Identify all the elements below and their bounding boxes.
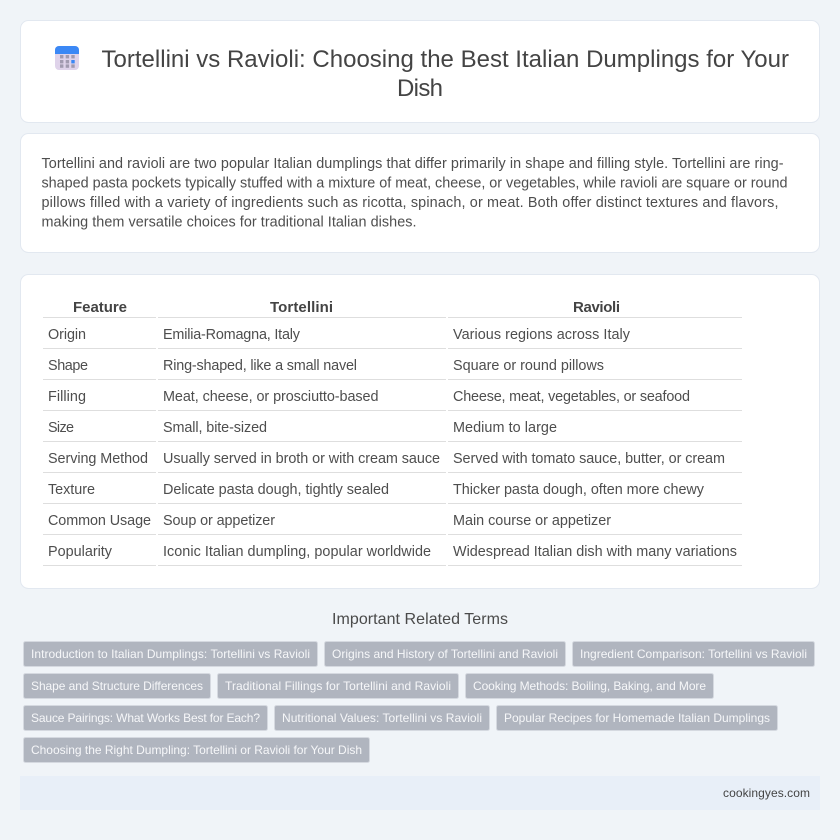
table row: popularity	[48, 544, 737, 560]
table row: filling	[48, 389, 690, 405]
tag: Popular Recipes for Homemade Italian Dumplings	[504, 711, 770, 725]
table row: filling: Cheese, meat, vegetables, or seafood	[453, 389, 690, 405]
tag	[24, 674, 210, 698]
table row: size: Size	[48, 420, 74, 436]
title: Dish	[397, 75, 443, 102]
table row: serving method: Served with tomato sauce, butter, or cream	[453, 451, 725, 467]
table row: serving method: Serving Method	[48, 451, 148, 467]
panel: introduction	[20, 134, 820, 252]
title	[102, 46, 789, 102]
table row: texture: Delicate pasta dough, tightly sealed	[163, 482, 389, 498]
table header: Feature	[73, 299, 127, 316]
table row: common usage: Soup or appetizer	[163, 513, 275, 529]
tag	[218, 674, 458, 698]
table row: popularity: Iconic Italian dumpling, popular worldwide	[163, 544, 431, 560]
table row: origin	[48, 327, 631, 343]
tag: Shape and Structure Differences	[31, 679, 203, 693]
table header: Tortellini	[270, 299, 333, 316]
table row: serving method: Usually served in broth or with cream sauce	[163, 451, 440, 467]
tag: Nutritional Values: Tortellini vs Ravioli	[282, 711, 482, 725]
tag: Cooking Methods: Boiling, Baking, and More	[473, 679, 706, 693]
table row lines	[43, 317, 742, 566]
tag	[274, 706, 490, 730]
tag: Choosing the Right Dumpling: Tortellini or Ravioli for Your Dish	[31, 743, 362, 757]
table row: shape: Square or round pillows	[453, 358, 604, 374]
tag	[466, 674, 714, 698]
table row: common usage: Main course or appetizer	[453, 513, 611, 529]
table row: filling: Filling	[48, 389, 86, 405]
table row: origin: Various regions across Italy	[453, 327, 631, 343]
table row: size: Small, bite-sized	[163, 420, 267, 436]
table header	[73, 299, 620, 316]
panel: comparison table	[20, 274, 820, 588]
table row: texture: Thicker pasta dough, often more chewy	[453, 482, 705, 498]
tag: Introduction to Italian Dumplings: Tortellini vs Ravioli	[31, 647, 310, 661]
table row: filling: Meat, cheese, or prosciutto-based	[163, 389, 378, 405]
text block: introduction paragraph: shaped pasta pockets typically stuffed with a mixture of meat, cheese, or vegetables, while ravioli are square or round	[42, 176, 788, 192]
tag: Sauce Pairings: What Works Best for Each?	[31, 711, 260, 725]
table row: texture: Texture	[48, 482, 95, 498]
tag	[24, 706, 268, 730]
tag: Origins and History of Tortellini and Ravioli	[332, 647, 558, 661]
footer source: cookingyes.com	[723, 786, 810, 800]
table row: size	[48, 420, 557, 436]
table row: shape: Shape	[48, 358, 88, 374]
table row: shape: Ring-shaped, like a small navel	[163, 358, 357, 374]
text block: introduction paragraph	[42, 156, 788, 230]
table row: popularity: Widespread Italian dish with many variations	[453, 544, 737, 560]
table row: serving method	[48, 451, 725, 467]
tag	[572, 642, 814, 666]
tag: Ingredient Comparison: Tortellini vs Ravioli	[580, 647, 807, 661]
text block: introduction paragraph: making them versatile choices for traditional Italian dishes.	[42, 214, 416, 230]
table row: popularity: Popularity	[48, 544, 113, 560]
panel: title header	[20, 20, 820, 122]
tag	[496, 706, 778, 730]
tag	[324, 642, 566, 666]
related terms tags	[24, 642, 814, 762]
tag	[24, 642, 318, 666]
text block: introduction paragraph: Tortellini and ravioli are two popular Italian dumplings that differ primarily in shape and filling style. Tortellini are ring-	[42, 156, 784, 172]
table row: origin: Origin	[48, 327, 86, 343]
heading: important related terms: Important Related Terms	[332, 611, 508, 628]
table row: common usage: Common Usage	[48, 513, 151, 529]
table header: Ravioli	[573, 299, 620, 316]
icon: calendar	[55, 46, 79, 70]
title: Tortellini vs Ravioli: Choosing the Best Italian Dumplings for Your	[102, 46, 789, 73]
table row: origin: Emilia-Romagna, Italy	[163, 327, 301, 343]
table row: texture	[48, 482, 705, 498]
table row: common usage	[48, 513, 611, 529]
tag: Traditional Fillings for Tortellini and Ravioli	[225, 679, 451, 693]
table row: shape	[48, 358, 604, 374]
text block: introduction paragraph: pillows filled with a variety of ingredients such as ricotta, spinach, or meat. Both offer distinct textures and flavors,	[42, 195, 778, 211]
footer bar	[20, 776, 820, 810]
table row: size: Medium to large	[453, 420, 557, 436]
tag	[24, 738, 370, 762]
